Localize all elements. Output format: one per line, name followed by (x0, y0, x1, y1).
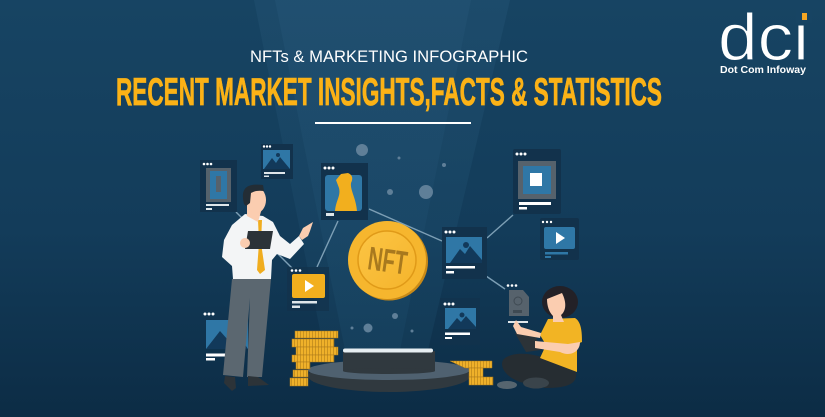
woman: arms (513, 320, 580, 354)
card: image bottom right (440, 298, 480, 345)
card: phone thumbnail (200, 160, 237, 212)
card: yellow video (287, 267, 329, 311)
card: image top (261, 144, 293, 179)
floating particles (350, 144, 446, 332)
coin: NFT: NFT (366, 239, 410, 282)
title underline (315, 122, 471, 124)
man: shirt (222, 214, 304, 279)
man: tie (257, 220, 265, 274)
man: trousers (223, 279, 271, 377)
subtitle: NFTs & MARKETING INFOGRAPHIC (250, 47, 528, 66)
card: square top right (513, 149, 561, 214)
coin: NFT (348, 221, 428, 300)
woman: shoes (497, 381, 517, 389)
podium (308, 348, 470, 392)
connector lines (236, 209, 513, 289)
card: image middle right (442, 227, 487, 279)
woman with tablet (497, 286, 582, 389)
woman: trousers (502, 354, 576, 388)
logo: Dot Com Infoway: Dot Com Infoway (720, 65, 806, 76)
man: pointing hand (299, 222, 313, 240)
woman: shirt (540, 318, 582, 372)
man: shoes (224, 376, 269, 391)
coin stack left (290, 331, 338, 386)
man presenting (222, 185, 313, 391)
man: neck and head (247, 206, 262, 222)
logo: Dot Com Infoway: dci (718, 0, 809, 74)
woman: face (547, 293, 565, 322)
woman: tablet (515, 333, 541, 352)
man: hair (243, 185, 264, 206)
man: tablet (245, 231, 273, 249)
coin stack right (450, 361, 493, 385)
woman: hair (542, 286, 578, 318)
card: video right (540, 218, 579, 260)
card: document (507, 284, 529, 323)
spotlight beam (254, 0, 510, 350)
card: image bottom left (204, 312, 248, 360)
card: knight NFT (321, 163, 368, 220)
